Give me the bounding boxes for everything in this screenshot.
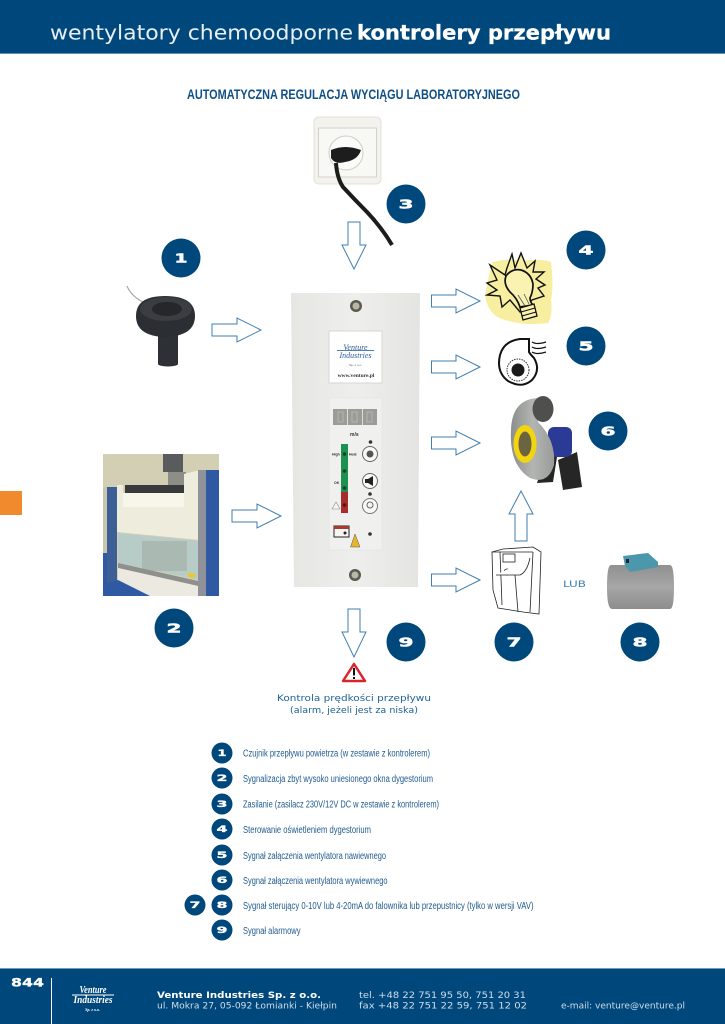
legend item 6: Sygnał załączenia wentylatora wywiewnego [243, 876, 388, 887]
badge 7 [494, 622, 534, 662]
badge 3: 3 [398, 196, 414, 212]
controller panel [291, 293, 420, 587]
legend item 3: Zasilanie (zasilacz 230V/12V DC w zestawie z kontrolerem) [243, 800, 439, 810]
company address [157, 991, 337, 1012]
arrow: output supply fan [432, 355, 480, 379]
arrow: up to exhaust fan [509, 491, 533, 541]
legend item 7 and 8 [184, 894, 534, 916]
orange section tab [0, 491, 22, 515]
legend [184, 742, 534, 940]
legend item 4: Sterowanie oświetleniem dygestorium [243, 825, 371, 836]
legend item 4: 4 [216, 825, 228, 835]
footer logo [72, 985, 114, 1012]
badge 6: 6 [600, 424, 616, 438]
connector and warning symbol [334, 526, 372, 547]
logo label: Sp. z o.o. [349, 363, 362, 367]
photo: exhaust fan [511, 396, 582, 490]
badge 3 [386, 184, 426, 224]
legend item 2: Sygnalizacja zbyt wysoko uniesionego okna dygestorium [243, 774, 433, 785]
photo: damper [607, 553, 674, 609]
badge 1 [162, 238, 200, 278]
company address: Venture Industries Sp. z o.o. [157, 991, 321, 1001]
legend item 7 and 8: 7 [190, 901, 201, 911]
badge 9 [386, 622, 426, 662]
control face [329, 398, 382, 550]
legend item 5: 5 [216, 851, 228, 861]
legend item 3 [212, 794, 439, 814]
lub label: LUB [563, 580, 586, 590]
screw bottom [349, 569, 361, 581]
page number: 844 [11, 976, 44, 990]
legend item 4 [212, 818, 371, 840]
icon: light bulb [485, 253, 552, 324]
footer logo: Venture [80, 985, 107, 996]
logo label: www.venture.pl [338, 373, 375, 379]
icon: supply fan [499, 339, 546, 385]
badge 6 [588, 412, 628, 450]
legend item 7 and 8: 8 [216, 901, 228, 911]
arrow: output exhaust fan [432, 431, 480, 455]
seven segment display [333, 409, 377, 425]
badge 9: 9 [398, 634, 414, 650]
badge 5 [566, 326, 606, 366]
photo: airflow sensor [127, 286, 195, 366]
footer logo: Sp. z o.o. [85, 1007, 100, 1012]
badge 7: 7 [506, 634, 522, 650]
legend item 9 [212, 920, 301, 940]
badge 5: 5 [578, 338, 594, 354]
legend item 6 [212, 870, 388, 890]
alarm caption: (alarm, jeżeli jest za niska) [290, 706, 418, 716]
arrow: sensor to controller [212, 318, 261, 342]
email: e-mail: venture@venture.pl [561, 1002, 685, 1012]
arrow: hood to controller [232, 504, 281, 528]
legend item 7 and 8: Sygnał sterujący 0-10V lub 4-20mA do falownika lub przepustnicy (tylko w wersji VAV) [243, 901, 534, 912]
phone and fax: fax +48 22 751 22 59, 751 12 02 [359, 1002, 527, 1012]
footer logo: Industries [73, 995, 112, 1006]
legend item 9: Sygnał alarmowy [243, 926, 301, 937]
icon: frequency inverter [492, 547, 541, 614]
photo: fume hood [103, 454, 219, 596]
control buttons [362, 440, 378, 514]
status bar: OK [334, 481, 340, 485]
control face: m/s [350, 432, 359, 438]
arrow: alarm output [342, 609, 366, 657]
company address: ul. Mokra 27, 05-092 Łomianki - Kiełpin [157, 1002, 337, 1012]
badge 2: 2 [166, 620, 182, 636]
alarm caption: Kontrola prędkości przepływu [277, 693, 431, 704]
logo label: Industries [338, 351, 372, 360]
icon: warning triangle [343, 664, 365, 681]
arrow: power to controller [342, 222, 366, 269]
phone and fax: tel. +48 22 751 95 50, 751 20 31 [359, 991, 526, 1001]
footer band [0, 968, 725, 1024]
badge 8: 8 [632, 634, 648, 650]
badge 1: 1 [174, 250, 188, 266]
arrow: output light [432, 289, 480, 313]
logo label: Venture [343, 343, 368, 352]
legend item 1: Czujnik przepływu powietrza (w zestawie z kontrolerem) [243, 748, 430, 760]
header band [0, 0, 725, 54]
header title: wentylatory chemoodporne [50, 20, 353, 44]
main heading: AUTOMATYCZNA REGULACJA WYCIĄGU LABORATORYJNEGO [187, 87, 520, 102]
legend item 6: 6 [216, 876, 228, 886]
legend item 2: 2 [216, 774, 228, 784]
header title: kontrolery przepływu [357, 20, 611, 44]
status bar: High [332, 452, 340, 456]
alarm caption [277, 693, 431, 716]
badge 2 [154, 608, 194, 648]
legend item 2 [212, 768, 433, 788]
badge 8 [620, 622, 660, 662]
header title [50, 20, 611, 44]
badge 4: 4 [578, 242, 594, 258]
legend item 5 [212, 844, 386, 866]
photo: wall socket with plug [314, 117, 392, 245]
legend item 9: 9 [216, 926, 228, 936]
legend item 1 [212, 742, 430, 764]
status bar: Heat [349, 452, 357, 456]
phone and fax [359, 991, 527, 1012]
screw top [350, 300, 362, 312]
status bar [332, 444, 357, 513]
legend item 5: Sygnał załączenia wentylatora nawiewnego [243, 851, 386, 862]
badge 4 [566, 230, 606, 270]
legend item 1: 1 [218, 749, 227, 759]
logo label [329, 331, 382, 383]
legend item 3: 3 [216, 800, 228, 810]
arrow: output control signal [432, 568, 480, 592]
